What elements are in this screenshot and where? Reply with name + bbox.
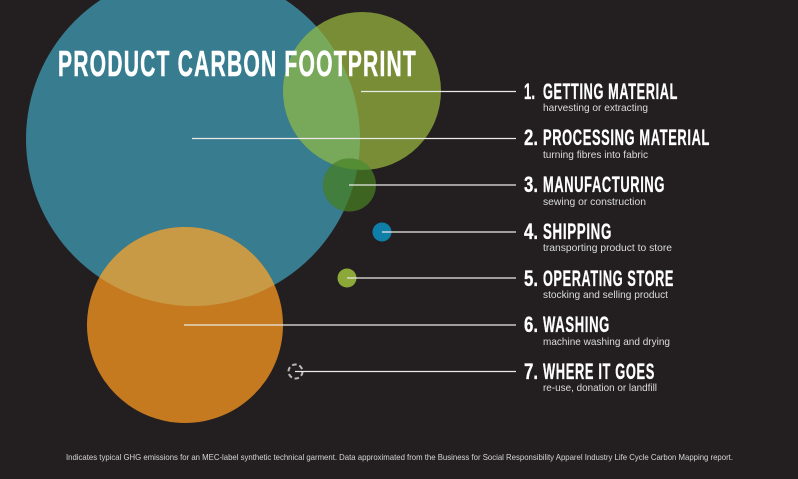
circle 6: washing	[87, 227, 283, 423]
leader line 5	[347, 277, 516, 279]
footnote: Indicates typical GHG emissions for an MEC-label synthetic technical garment. Data approximated from the Business for Social Responsibility Apparel Industry Life Cycle Carbon Mapping report.	[66, 452, 733, 462]
item 7: where it goes: re-use, donation or landfill	[543, 382, 657, 394]
leader line 2	[192, 138, 516, 140]
circle 3: manufacturing	[323, 158, 376, 212]
circle 1: getting material	[283, 12, 441, 170]
item 4: shipping: 4.	[524, 219, 538, 244]
item 3: manufacturing: sewing or construction	[543, 196, 646, 208]
item 7: where it goes: WHERE IT GOES	[543, 359, 655, 384]
circle 4: shipping	[372, 222, 392, 242]
circle 2: processing material	[26, 0, 360, 306]
item 5: operating store: stocking and selling product	[543, 289, 668, 301]
item 5: operating store	[524, 266, 674, 301]
item 4: shipping: SHIPPING	[543, 219, 612, 244]
item 1: getting material: harvesting or extracting	[543, 102, 648, 114]
item 7: where it goes: 7.	[524, 359, 538, 384]
item 4: shipping: transporting product to store	[543, 242, 672, 254]
item 1: getting material: GETTING MATERIAL	[543, 79, 678, 104]
item 5: operating store: 5.	[524, 266, 538, 291]
item 3: manufacturing: MANUFACTURING	[543, 172, 665, 197]
leader line 3	[349, 184, 516, 186]
circle 7: where it goes	[288, 364, 302, 378]
leader line 6	[184, 324, 516, 326]
item 3: manufacturing: 3.	[524, 172, 538, 197]
item 7: where it goes	[524, 359, 657, 394]
leader line 7	[295, 370, 516, 372]
item 6: washing: WASHING	[543, 312, 610, 337]
item 2: processing material: 2.	[524, 125, 538, 150]
item 1: getting material	[524, 79, 678, 114]
item 4: shipping	[524, 219, 672, 254]
circle 5: operating store	[338, 268, 356, 288]
leader line 4	[382, 231, 516, 233]
item 2: processing material	[524, 125, 710, 161]
title: PRODUCT CARBON FOOTPRINT	[58, 43, 417, 84]
item 3: manufacturing	[524, 172, 665, 208]
item 6: washing	[524, 312, 670, 348]
leader line 1	[361, 90, 516, 92]
item 1: getting material: 1.	[524, 79, 535, 104]
item 6: washing: 6.	[524, 312, 538, 337]
item 5: operating store: OPERATING STORE	[543, 266, 674, 291]
item 6: washing: machine washing and drying	[543, 336, 670, 348]
item 2: processing material: turning fibres into fabric	[543, 149, 648, 161]
